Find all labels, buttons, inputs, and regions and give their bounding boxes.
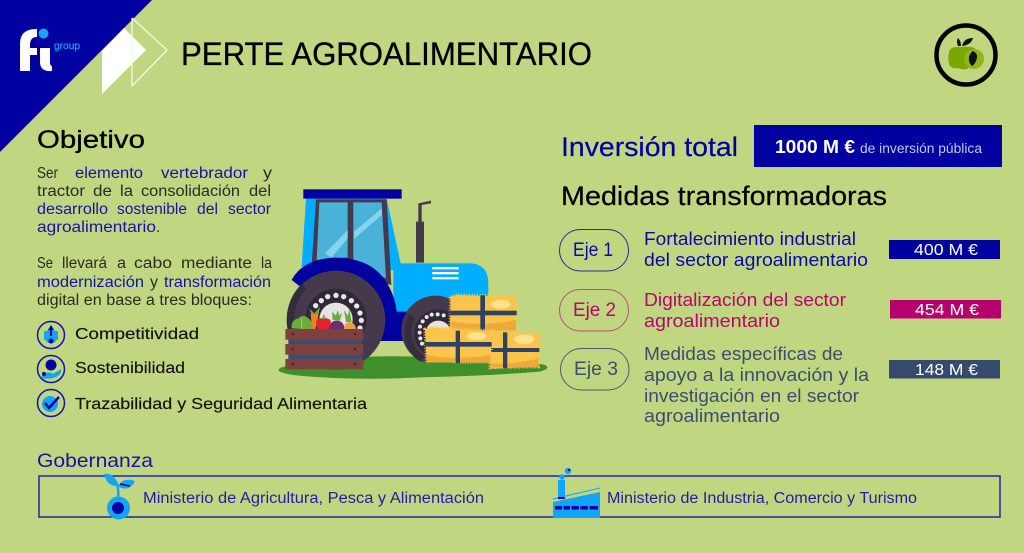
text block: objetivo paragraph 1: de bbox=[93, 183, 112, 200]
vegetables bbox=[292, 307, 356, 330]
eje 3: agroalimentario bbox=[644, 406, 780, 426]
eje 1: Eje 1 bbox=[573, 240, 613, 261]
text: ministerio de agricultura: Ministerio de Agricultura, Pesca y Alimentación bbox=[143, 490, 484, 507]
label: Competitividad: Competitividad bbox=[75, 326, 199, 343]
callout: total investment: de inversión pública bbox=[860, 141, 982, 156]
heading: Inversión total: Inversión total bbox=[561, 132, 738, 162]
callout: total investment bbox=[754, 125, 1002, 167]
ground bbox=[278, 356, 547, 379]
heading: Objetivo: Objetivo bbox=[37, 126, 145, 154]
text: ministerio de industria: Ministerio de Industria, Comercio y Turismo bbox=[607, 490, 917, 507]
text block: objetivo paragraph 1: elemento bbox=[75, 165, 143, 182]
text block: objetivo paragraph 1 bbox=[37, 165, 272, 236]
grass bbox=[422, 363, 537, 373]
icon: factory bbox=[553, 468, 600, 518]
eje 2: Digitalización del sector bbox=[644, 290, 846, 310]
eje 3: apoyo a la innovación y la bbox=[644, 365, 870, 385]
front wheel bbox=[401, 296, 470, 364]
eje 3: Eje 3 bbox=[574, 359, 618, 380]
eje 1 bbox=[560, 229, 1000, 271]
text block: objetivo paragraph 1: vertebrador bbox=[161, 165, 248, 182]
eje 2: Eje 2 bbox=[573, 300, 616, 321]
hood bbox=[393, 263, 488, 312]
eje 3 bbox=[560, 344, 1000, 426]
text block: objetivo paragraph 1: la bbox=[120, 183, 133, 200]
icon: seedling bbox=[104, 474, 135, 520]
icon: sostenibilidad bbox=[38, 356, 64, 382]
callout: total investment: 1000 M € bbox=[775, 137, 855, 157]
illustration: tractor with crate and hay bales bbox=[278, 189, 547, 379]
text block: objetivo paragraph 2: llevará bbox=[62, 255, 107, 272]
text block: objetivo paragraph 2: la bbox=[261, 255, 272, 272]
eje 2: agroalimentario bbox=[644, 311, 780, 331]
heading: Medidas transformadoras: Medidas transformadoras bbox=[561, 181, 887, 211]
logo: fi group bbox=[20, 28, 80, 71]
text block: objetivo paragraph 2: mediante bbox=[181, 255, 252, 272]
text block: objetivo paragraph 1: del bbox=[249, 183, 271, 200]
logo: fi group: group bbox=[54, 41, 80, 52]
text block: objetivo paragraph 1: tractor bbox=[37, 183, 85, 200]
body bbox=[292, 258, 407, 341]
text block: objetivo paragraph 1: del bbox=[197, 201, 218, 218]
cab bbox=[302, 189, 405, 285]
eje 3: investigación en el sector bbox=[644, 386, 859, 406]
text block: objetivo paragraph 1: desarrollo bbox=[37, 201, 108, 218]
text block: objetivo paragraph 1: agroalimentario bbox=[37, 219, 156, 236]
icon: apple bbox=[936, 26, 996, 84]
icon: competitividad bbox=[38, 322, 64, 348]
text block: objetivo paragraph 1: . bbox=[156, 219, 160, 236]
vents bbox=[432, 267, 459, 279]
hay bales bbox=[425, 295, 539, 369]
panel: gobernanza bbox=[39, 476, 1000, 517]
crate bbox=[285, 329, 363, 369]
text block: objetivo paragraph 1: sector bbox=[228, 201, 271, 218]
text block: objetivo paragraph 2: modernización bbox=[37, 274, 144, 291]
eje 1: del sector agroalimentario bbox=[644, 250, 868, 270]
text block: objetivo paragraph 1: Ser bbox=[37, 165, 58, 182]
text block: objetivo paragraph 2: transformación bbox=[164, 274, 271, 291]
text block: objetivo paragraph 2: Se bbox=[37, 255, 53, 272]
text block: objetivo paragraph 1: y bbox=[263, 165, 272, 182]
eje 1: Fortalecimiento industrial bbox=[644, 229, 856, 249]
text block: objetivo paragraph 2: y bbox=[150, 274, 158, 291]
label: Trazabilidad y Seguridad Alimentaria: Trazabilidad y Seguridad Alimentaria bbox=[75, 396, 367, 413]
title: PERTE AGROALIMENTARIO bbox=[181, 36, 592, 72]
corner banner bbox=[0, 0, 152, 152]
icon: white arrow bbox=[102, 18, 167, 94]
heading: Gobernanza: Gobernanza bbox=[37, 450, 153, 472]
text block: objetivo paragraph 1: sostenible bbox=[117, 201, 187, 218]
rear wheel bbox=[287, 271, 385, 369]
eje 3: Medidas específicas de bbox=[644, 344, 843, 364]
eje 2 bbox=[560, 290, 1001, 331]
text block: objetivo paragraph 2 bbox=[37, 255, 272, 309]
eje 2: 454 M € bbox=[915, 302, 979, 319]
exhaust bbox=[416, 201, 431, 263]
text block: objetivo paragraph 2: cabo bbox=[134, 255, 172, 272]
eje 3: 148 M € bbox=[915, 362, 978, 379]
eje 1: 400 M € bbox=[914, 242, 978, 259]
text block: objetivo paragraph 2: digital en base a tres bloques: bbox=[37, 292, 252, 309]
label: Sostenibilidad: Sostenibilidad bbox=[75, 360, 185, 377]
text block: objetivo paragraph 2: a bbox=[117, 255, 126, 272]
icon: trazabilidad bbox=[38, 390, 64, 416]
text block: objetivo paragraph 1: consolidación bbox=[141, 183, 240, 200]
